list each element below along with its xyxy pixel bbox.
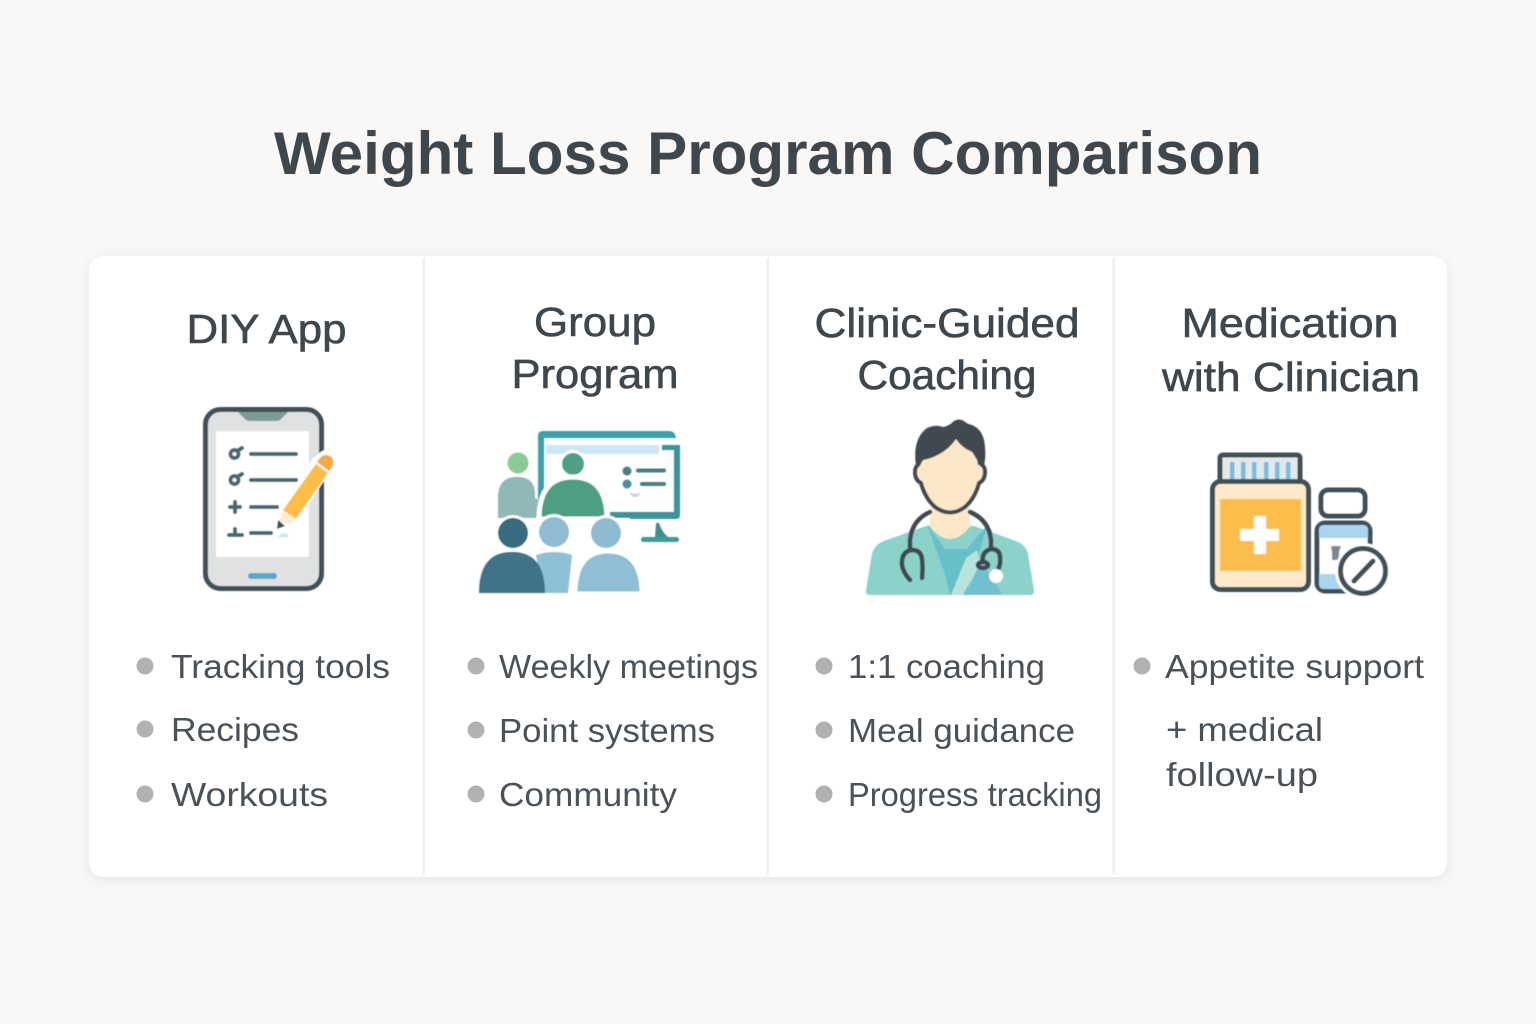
list: DIY App features: Tracking tools [171, 648, 390, 685]
list: Clinic-Guided Coaching features: Progress tracking [848, 776, 1102, 813]
list: Group Program features: Point systems [499, 712, 715, 749]
panel: Medication with Clinician [1134, 300, 1424, 793]
heading: Group Program: Program [512, 351, 678, 397]
heading: Group Program: Group [534, 299, 656, 345]
heading: Medication with Clinician [1161, 300, 1420, 400]
list: Clinic-Guided Coaching features: 1:1 coaching [848, 648, 1045, 685]
icon: medication bottles [1212, 455, 1391, 599]
panel: Clinic-Guided Coaching [814, 300, 1102, 813]
list: Clinic-Guided Coaching features: Meal guidance [848, 712, 1075, 749]
heading: Clinic-Guided Coaching: Coaching [858, 352, 1036, 398]
panel: DIY App [136, 306, 390, 813]
icon: group with presentation screen [479, 431, 680, 593]
list: Group Program features: Weekly meetings [499, 648, 758, 685]
list: DIY App features [136, 648, 390, 813]
title: Weight Loss Program Comparison [274, 120, 1262, 187]
heading: DIY App: DIY App [186, 306, 346, 352]
icon: clinician with stethoscope [866, 420, 1034, 595]
panel: comparison card [89, 256, 1447, 877]
list: Clinic-Guided Coaching features [816, 648, 1102, 813]
panel: Group Program [468, 299, 758, 813]
list: Medication features: Appetite support [1165, 648, 1424, 685]
list: Group Program features: Community [499, 776, 678, 813]
list: Medication features: follow-up [1166, 756, 1318, 793]
heading: Clinic-Guided Coaching: Clinic-Guided [814, 300, 1080, 346]
list: DIY App features: Recipes [171, 711, 299, 748]
list: Medication features: + medical [1166, 711, 1323, 748]
heading: Group Program [512, 299, 678, 397]
heading: Medication with Clinician: with Clinician [1161, 354, 1420, 400]
heading: Medication with Clinician: Medication [1182, 300, 1398, 346]
list: DIY App features: Workouts [171, 776, 328, 813]
list: Group Program features [468, 648, 758, 813]
list: Medication features [1134, 648, 1424, 793]
icon: phone checklist [206, 410, 336, 588]
heading: Clinic-Guided Coaching [814, 300, 1080, 398]
